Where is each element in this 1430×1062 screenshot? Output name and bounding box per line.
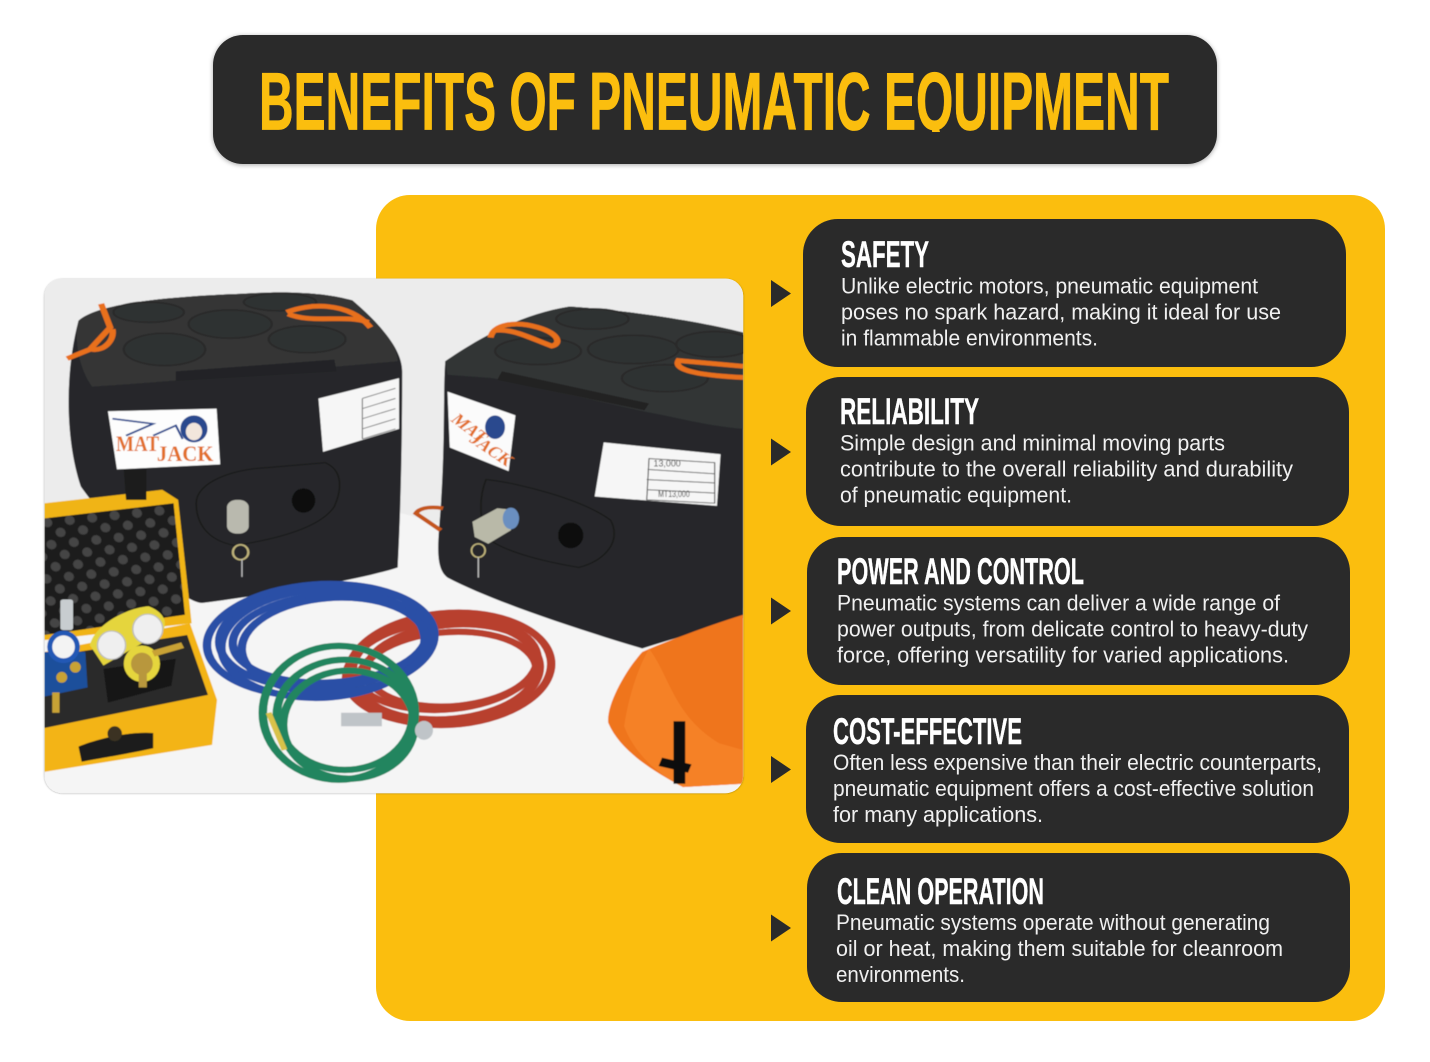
arrow: reliability — [771, 438, 791, 466]
left bag — [69, 292, 402, 603]
photo: inflatable bags, hoses and control case: JACK — [157, 442, 214, 466]
text: clean operation — [836, 910, 1283, 987]
yellow case — [45, 490, 192, 640]
text: cost-effective: for many applications. — [833, 802, 1043, 827]
panel: yellow background — [376, 195, 1385, 1021]
card: reliability — [806, 377, 1349, 526]
arrow: cost-effective — [771, 756, 791, 783]
text: power and control — [837, 590, 1308, 668]
text: safety: poses no spark hazard, making it ideal for use — [841, 300, 1281, 324]
text: clean operation: environments. — [836, 962, 965, 987]
heading: clean operation: CLEAN OPERATION — [837, 871, 1044, 912]
photo: inflatable bags, hoses and control case: JACK — [465, 431, 519, 470]
text: reliability: contribute to the overall reliability and durability — [840, 456, 1293, 482]
photo: inflatable bags, hoses and control case: MT13,000 — [658, 490, 690, 500]
text: clean operation: oil or heat, making them suitable for cleanroom — [836, 936, 1283, 961]
title banner — [213, 35, 1217, 164]
blue hose — [199, 576, 442, 705]
text: power and control: force, offering versatility for varied applications. — [837, 642, 1289, 668]
text: reliability: Simple design and minimal moving parts — [840, 430, 1225, 456]
right bag — [438, 307, 743, 649]
photo: inflatable bags, hoses and control case: MAT — [447, 411, 493, 446]
arrow: safety — [771, 280, 791, 307]
photo: inflatable bags, hoses and control case — [45, 278, 753, 793]
text: power and control: power outputs, from delicate control to heavy-duty — [837, 616, 1308, 642]
text: clean operation: Pneumatic systems operate without generating — [836, 910, 1270, 935]
photo: inflatable bags, hoses and control case: 13,000 — [654, 460, 681, 469]
heading: safety: SAFETY — [841, 234, 929, 275]
card: safety — [803, 219, 1346, 367]
heading: cost-effective: COST-EFFECTIVE — [833, 711, 1022, 752]
text: power and control: Pneumatic systems can deliver a wide range of — [837, 590, 1281, 616]
text: safety — [841, 274, 1281, 350]
text: safety: Unlike electric motors, pneumatic equipment — [841, 274, 1258, 298]
card: cost-effective — [806, 695, 1349, 843]
card: power and control — [807, 537, 1350, 685]
photo: inflatable bags, hoses and control case: MAT — [116, 431, 159, 456]
text: cost-effective — [833, 750, 1322, 827]
orange bag — [608, 615, 743, 787]
text: cost-effective: pneumatic equipment offers a cost-effective solution — [833, 776, 1314, 801]
arrow: power and control — [771, 598, 791, 624]
text: reliability — [840, 430, 1293, 508]
text: cost-effective: Often less expensive than their electric counterparts, — [833, 750, 1322, 775]
card: clean operation — [807, 853, 1350, 1002]
text: reliability: of pneumatic equipment. — [840, 482, 1072, 508]
heading: power and control: POWER AND CONTROL — [837, 551, 1084, 592]
red hose — [341, 608, 556, 729]
arrow: clean operation — [771, 914, 791, 942]
heading: reliability: RELIABILITY — [840, 391, 979, 432]
green hose — [263, 646, 415, 780]
text: safety: in flammable environments. — [841, 326, 1098, 350]
